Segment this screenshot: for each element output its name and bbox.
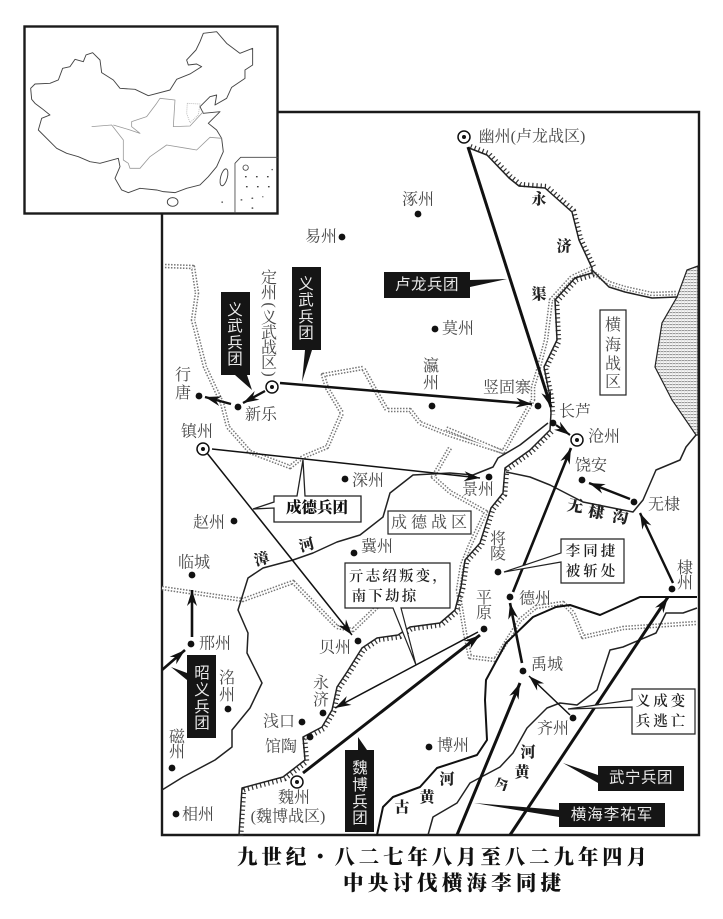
callout: Li Tongjie execution site: 被斩处 bbox=[566, 562, 618, 580]
label: Henghai war zone: 横 bbox=[605, 316, 621, 334]
river labels: 棣 bbox=[587, 501, 606, 523]
place labels: 易州 bbox=[305, 228, 337, 246]
place labels: 莫州 bbox=[442, 318, 474, 338]
city dots bbox=[169, 211, 675, 817]
place labels: ) bbox=[260, 371, 278, 377]
river labels: 黄 bbox=[514, 763, 532, 781]
place labels: 临城 bbox=[178, 554, 210, 572]
Hainan bbox=[167, 198, 178, 206]
river labels: 无 bbox=[566, 495, 585, 517]
place labels: 魏州 bbox=[278, 788, 310, 806]
label: Henghai war zone bbox=[600, 310, 626, 395]
place labels: 将 bbox=[490, 530, 506, 548]
place labels: 景州 bbox=[462, 480, 494, 498]
place labels: 州 bbox=[261, 284, 277, 302]
place labels: 战 bbox=[261, 338, 277, 356]
place labels: 沧州 bbox=[588, 428, 620, 446]
callout: Kang Zhishao revolt bbox=[345, 563, 450, 665]
callout: Yiwu army (right): 武 bbox=[298, 290, 314, 308]
callout: Weibo army: 团 bbox=[352, 810, 368, 826]
callout: Henghai Li You army bbox=[474, 803, 665, 827]
arrow: Zhaoyi army to Xingzhou bbox=[162, 650, 185, 670]
place labels: 涿州 bbox=[402, 190, 434, 208]
place labels: 贝州 bbox=[319, 638, 351, 656]
river labels: 永 bbox=[531, 190, 547, 208]
dotted regional boundaries bbox=[162, 266, 696, 660]
river labels bbox=[252, 190, 630, 816]
place labels: 唐 bbox=[175, 384, 191, 402]
label: Henghai war zone: 战 bbox=[605, 354, 621, 372]
river labels: 河 bbox=[297, 535, 316, 556]
river labels: 渠 bbox=[531, 285, 547, 303]
callout: Yiwu army (right): 兵 bbox=[298, 308, 314, 326]
callout: Yicheng troops flee: 义成变 bbox=[636, 692, 688, 710]
river labels: 今 bbox=[492, 774, 511, 796]
arrow: Wuning army to Dizhou bbox=[510, 597, 668, 835]
callout: Zhaoyi army: 义 bbox=[194, 680, 210, 698]
place labels: 定 bbox=[261, 268, 277, 286]
panel: main map bbox=[162, 112, 699, 837]
place labels: 齐州 bbox=[537, 720, 569, 738]
river: Wudi gou bbox=[506, 435, 696, 512]
place labels: 行 bbox=[175, 366, 191, 384]
callout: Yiwu army (right): 团 bbox=[298, 324, 314, 342]
arrow: Qizhou to Yucheng bbox=[529, 676, 570, 715]
icon: command cities (double circles) bbox=[197, 131, 583, 788]
place labels: 陵 bbox=[490, 544, 506, 562]
callout: Kang Zhishao revolt: 南下劫掠 bbox=[352, 587, 418, 605]
callout: Yiwu army (right): 义 bbox=[298, 274, 314, 292]
sea area bbox=[655, 266, 698, 435]
place labels: 义 bbox=[261, 308, 277, 326]
callout: Lulong army: 卢龙兵团 bbox=[395, 276, 459, 294]
river labels: 河 bbox=[520, 744, 536, 761]
arrow: Kang Zhishao south bbox=[335, 632, 478, 708]
callout: Henghai Li You army: 横海李祐军 bbox=[571, 806, 653, 824]
arrow: Xingzhou to Lincheng bbox=[191, 590, 193, 637]
river: Zhang he bbox=[162, 423, 548, 790]
callout: Chengde army bbox=[253, 460, 361, 522]
place labels: 区 bbox=[261, 354, 277, 372]
river labels: 漳 bbox=[252, 548, 271, 570]
place labels: 原 bbox=[476, 604, 492, 622]
place labels: 磁 bbox=[169, 728, 186, 746]
place labels: 幽州(卢龙战区) bbox=[479, 128, 585, 146]
place labels: 长芦 bbox=[559, 402, 591, 420]
place labels: 永 bbox=[313, 674, 329, 692]
place labels: (魏博战区) bbox=[251, 808, 325, 826]
callout: Yiwu army (left): 武 bbox=[227, 316, 243, 334]
place labels: 平 bbox=[476, 588, 492, 606]
place labels: 禹城 bbox=[531, 656, 563, 674]
label: Chengde war zone: 成德战区 bbox=[391, 514, 471, 532]
place labels: 棣 bbox=[677, 558, 693, 576]
callout: Weibo army: 兵 bbox=[352, 792, 368, 810]
place labels: 浅口 bbox=[263, 712, 295, 730]
callout: Yiwu army (left) bbox=[221, 292, 252, 390]
label: Henghai war zone: 海 bbox=[605, 336, 621, 354]
place labels: 深州 bbox=[352, 472, 384, 490]
callout: Chengde army: 成德兵团 bbox=[286, 498, 348, 516]
river labels: 黄 bbox=[419, 788, 437, 806]
callout: Yicheng troops flee: 兵逃亡 bbox=[636, 713, 688, 730]
callout: Zhaoyi army: 兵 bbox=[194, 698, 210, 716]
river labels: 沟 bbox=[611, 506, 630, 528]
place labels: 州 bbox=[169, 742, 185, 760]
river labels: 河 bbox=[439, 771, 455, 788]
callout: Li Tongjie execution site bbox=[504, 539, 624, 583]
callout: Yiwu army (left): 义 bbox=[227, 300, 243, 318]
place labels: 博州 bbox=[437, 736, 469, 754]
map frame bbox=[162, 112, 699, 835]
arrow: Zhenzhou to Jingzhou bbox=[212, 449, 480, 478]
callout: Weibo army: 魏 bbox=[352, 758, 368, 776]
river: old Yellow River bbox=[377, 597, 697, 835]
place labels: 济 bbox=[313, 690, 329, 708]
highlighted region bbox=[187, 103, 200, 123]
place labels: ( bbox=[260, 302, 278, 308]
arrow: Changlu to Cangzhou bbox=[556, 425, 570, 435]
arrow: Wudi to Raoan bbox=[589, 483, 630, 499]
arrow: Weibo army to Pingyuan bbox=[303, 635, 480, 773]
arrow: Henghai army to Yucheng bbox=[457, 683, 520, 835]
river: present Yellow River bbox=[428, 608, 697, 835]
islands bbox=[222, 169, 273, 208]
South China Sea inset bbox=[235, 157, 278, 213]
arrow: Xinle to Xingtang bbox=[205, 397, 231, 404]
title: 九世纪・八二七年八月至八二九年四月 bbox=[237, 845, 647, 869]
arrow: Yucheng to Dezhou bbox=[510, 603, 522, 663]
place labels: 相州 bbox=[182, 806, 214, 824]
callout: Lulong army bbox=[384, 272, 507, 298]
title bbox=[237, 845, 647, 895]
place labels: 饶安 bbox=[575, 456, 607, 474]
arrow: Lulong army bbox=[468, 147, 551, 407]
internal boundaries bbox=[92, 98, 222, 168]
place labels: 镇州 bbox=[181, 422, 213, 440]
place labels: 州 bbox=[423, 374, 439, 392]
callout: Kang Zhishao revolt: 亓志绍叛变， bbox=[349, 567, 449, 585]
place labels: 馆陶 bbox=[265, 738, 297, 756]
place labels bbox=[169, 128, 693, 826]
place labels: 邢州 bbox=[199, 634, 231, 652]
callout: Zhaoyi army bbox=[171, 655, 216, 738]
place labels: 武 bbox=[261, 324, 277, 342]
arrow: Yiwu army east bbox=[280, 383, 532, 404]
place labels: 德州 bbox=[519, 590, 551, 608]
callout: Yicheng troops flee bbox=[568, 689, 695, 734]
callout: Yiwu army (left): 兵 bbox=[227, 334, 243, 352]
place labels: 赵州 bbox=[193, 514, 225, 532]
callout: Zhaoyi army: 昭 bbox=[194, 664, 210, 682]
callout: Wuning army bbox=[563, 763, 684, 791]
Taiwan bbox=[219, 168, 229, 187]
callout: Wuning army: 武宁兵团 bbox=[609, 768, 673, 786]
arrow: Dingzhou to Xinle bbox=[243, 391, 265, 403]
label: Henghai war zone: 区 bbox=[605, 372, 621, 390]
title: 中央讨伐横海李同捷 bbox=[343, 872, 562, 895]
place labels: 瀛 bbox=[423, 356, 439, 374]
callout: Yiwu army (left): 团 bbox=[227, 350, 243, 368]
panel: China locator inset bbox=[24, 26, 278, 214]
place labels: 冀州 bbox=[361, 538, 393, 556]
place labels: 新乐 bbox=[245, 406, 278, 424]
arrow: Dezhou to Cangzhou bbox=[513, 448, 571, 592]
place labels: 无棣 bbox=[648, 496, 680, 514]
arrow: Dizhou to Wudi bbox=[640, 513, 673, 583]
arrow: Zhenzhou to Beizhou bbox=[207, 453, 352, 635]
callout: Yiwu army (right) bbox=[292, 267, 321, 382]
callout: Li Tongjie execution site: 李同捷 bbox=[566, 542, 618, 560]
river labels: 济 bbox=[556, 237, 572, 255]
canal: Yongji qu bbox=[239, 146, 594, 837]
callout: Weibo army: 博 bbox=[352, 776, 368, 794]
callout: Zhaoyi army: 团 bbox=[194, 714, 210, 732]
callout: Weibo army bbox=[345, 737, 374, 832]
place labels: 竖固寨 bbox=[483, 378, 531, 396]
place labels: 州 bbox=[219, 686, 235, 704]
river labels: 古 bbox=[394, 798, 410, 816]
place labels: 洺 bbox=[219, 668, 235, 686]
icon: China outline bbox=[31, 32, 253, 193]
river to the sea bbox=[592, 270, 677, 298]
place labels: 州 bbox=[677, 574, 693, 592]
